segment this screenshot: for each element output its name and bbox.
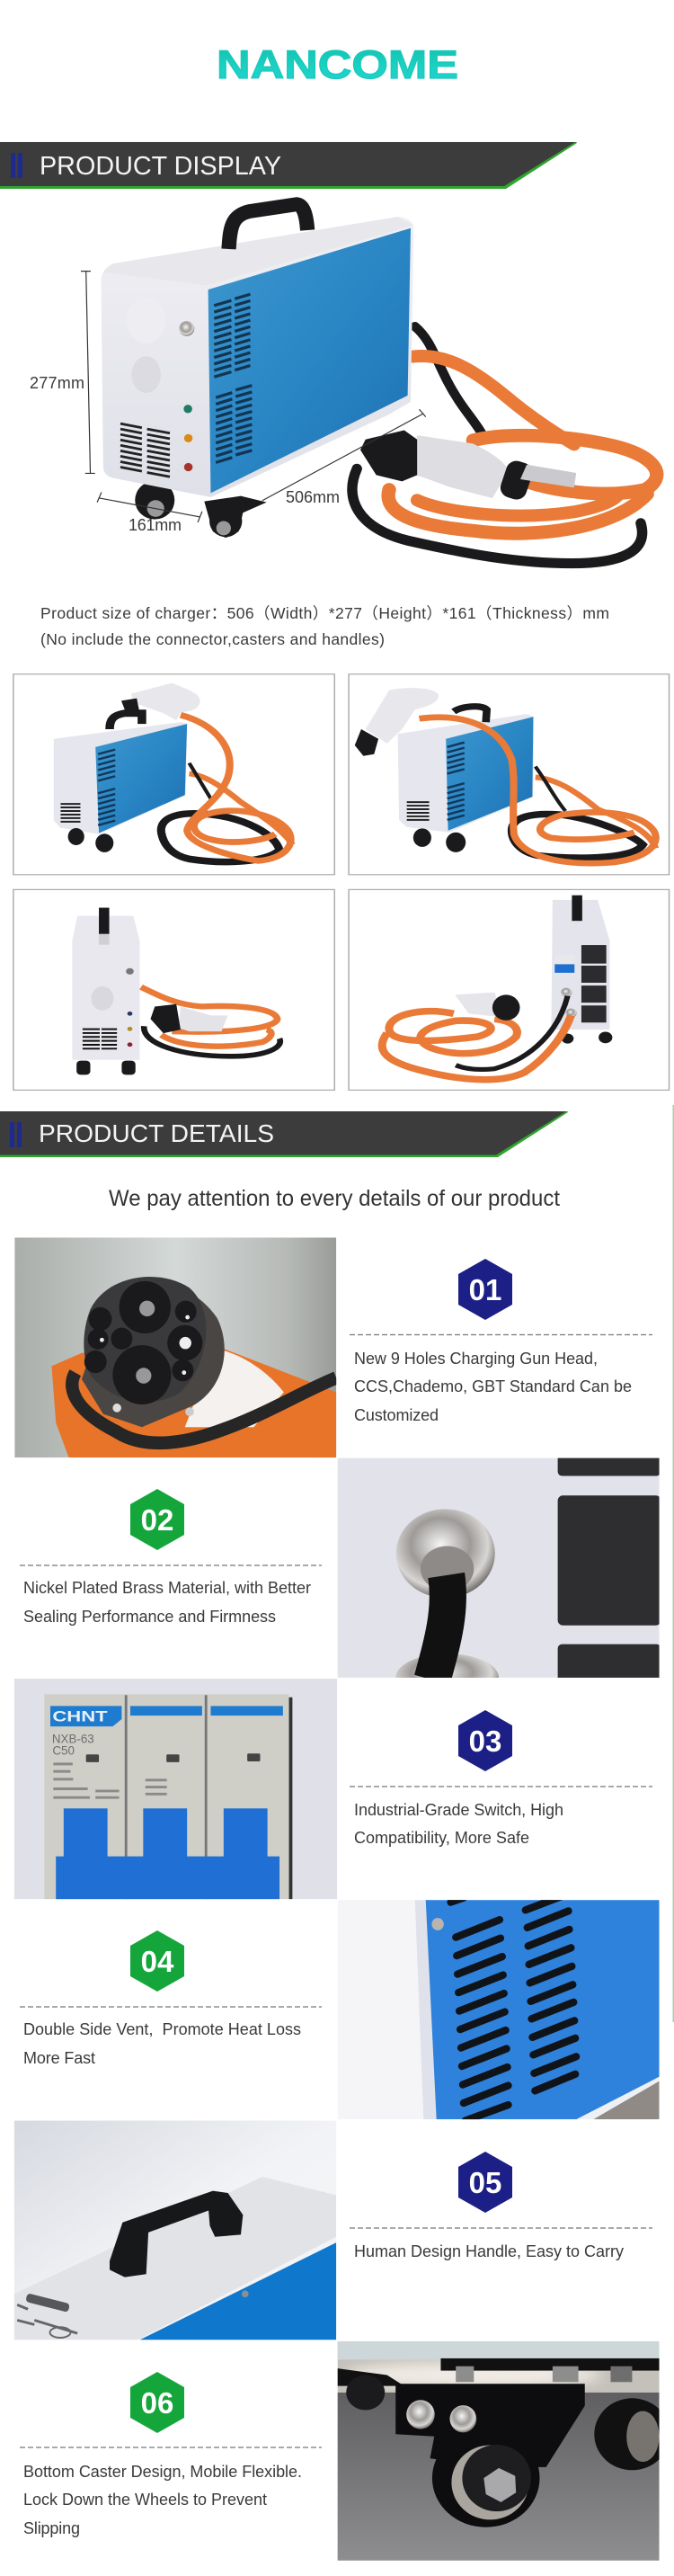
logo: Nancome: NANCOME [217,43,458,87]
badge 03: 03 [469,1725,501,1758]
divider 03 [350,1786,652,1787]
text: feature 06: Bottom Caster Design, Mobile Flexible. [23,2463,302,2481]
photo: industrial-grade breaker [14,1679,337,1908]
vent slots on white side [120,423,170,477]
dimension label: width: 506mm [286,488,340,506]
text: feature 03: Compatibility, More Safe [354,1829,529,1847]
badge 05 [458,2152,512,2213]
text: feature 03 [354,1801,563,1847]
dimension label: height: 277mm [30,374,84,392]
text: feature 02 [23,1579,311,1626]
text: feature 06: Slipping [23,2519,80,2537]
casters [135,481,267,538]
charger cables behind the body [352,326,657,564]
connector [360,431,576,502]
section banner: product display [0,142,577,189]
text: feature 01: CCS,Chademo, GBT Standard Can be [354,1377,632,1395]
photo: industrial-grade breaker: C50 [52,1744,75,1758]
text: feature 01: New 9 Holes Charging Gun Head, [354,1350,598,1368]
thumbnail: charger with plug on handle [13,674,334,875]
photo: double side vent [338,1894,660,2121]
handle [229,204,307,249]
badge 06 [130,2372,184,2433]
photo: nickel plated brass gland [338,1458,660,1678]
photo: industrial-grade breaker: CHNT [52,1707,109,1725]
divider 05 [350,2227,652,2229]
divider 04 [20,2006,322,2008]
text: feature 01 [354,1350,632,1424]
badge 02: 02 [141,1503,173,1537]
badge 04: 04 [141,1945,174,1978]
text: feature 06 [23,2463,302,2537]
text: feature 04: Double Side Vent, Promote Heat Loss [23,2020,301,2038]
right edge accent line [672,1105,674,2022]
thumbnail: charger front view [13,889,334,1090]
pins [100,1301,191,1384]
charger body [101,217,413,497]
badge 02 [130,1489,184,1550]
product size note: Product size of charger：506（Width）*277（Height）*161（Thickness）mm [40,604,609,622]
badge 01: 01 [469,1273,501,1306]
badge 04 [130,1930,184,1992]
photo: industrial-grade breaker: NXB-63 [52,1733,94,1746]
gland and indicator lights [127,298,194,471]
section banner: product details [0,1111,568,1157]
vent slots on blue panel [214,294,252,462]
photo: handle [14,2121,336,2340]
product size note: (No include the connector,casters and handles) [40,630,385,648]
badge 06: 06 [141,2386,173,2420]
text: feature 02: Nickel Plated Brass Material, with Better [23,1579,311,1597]
text: feature 04 [23,2020,301,2067]
vent slots [450,1898,509,2121]
text: feature 04: More Fast [23,2049,95,2067]
thumbnail: charger with plug raised [349,674,670,875]
blue side panel [208,228,411,493]
top face [103,217,413,285]
text: feature 02: Sealing Performance and Firmness [23,1608,276,1626]
text: feature 05: Human Design Handle, Easy to Carry [354,2242,624,2260]
dimension lines [81,272,426,522]
product size note [40,604,609,648]
divider 06 [20,2447,322,2448]
badge 05: 05 [469,2166,501,2199]
section banner: product display: PRODUCT DISPLAY [40,152,281,181]
photo: bottom caster [338,2341,670,2563]
divider 02 [20,1564,322,1566]
badge 03 [458,1710,512,1771]
text: feature 06: Lock Down the Wheels to Prevent [23,2491,267,2509]
text: feature 01: Customized [354,1406,439,1424]
subheading: We pay attention to every details of our product [109,1186,560,1211]
hero product photo: charger with dimensions [81,204,657,564]
divider 01 [350,1334,652,1336]
section banner: product details: PRODUCT DETAILS [39,1119,274,1147]
thumbnail: charger rear view [349,889,670,1090]
badge 01 [458,1259,512,1320]
text: feature 03: Industrial-Grade Switch, High [354,1801,563,1819]
photo: charging gun head [14,1237,336,1457]
connector holes [84,1281,202,1404]
dimension label: thickness: 161mm [129,516,182,534]
